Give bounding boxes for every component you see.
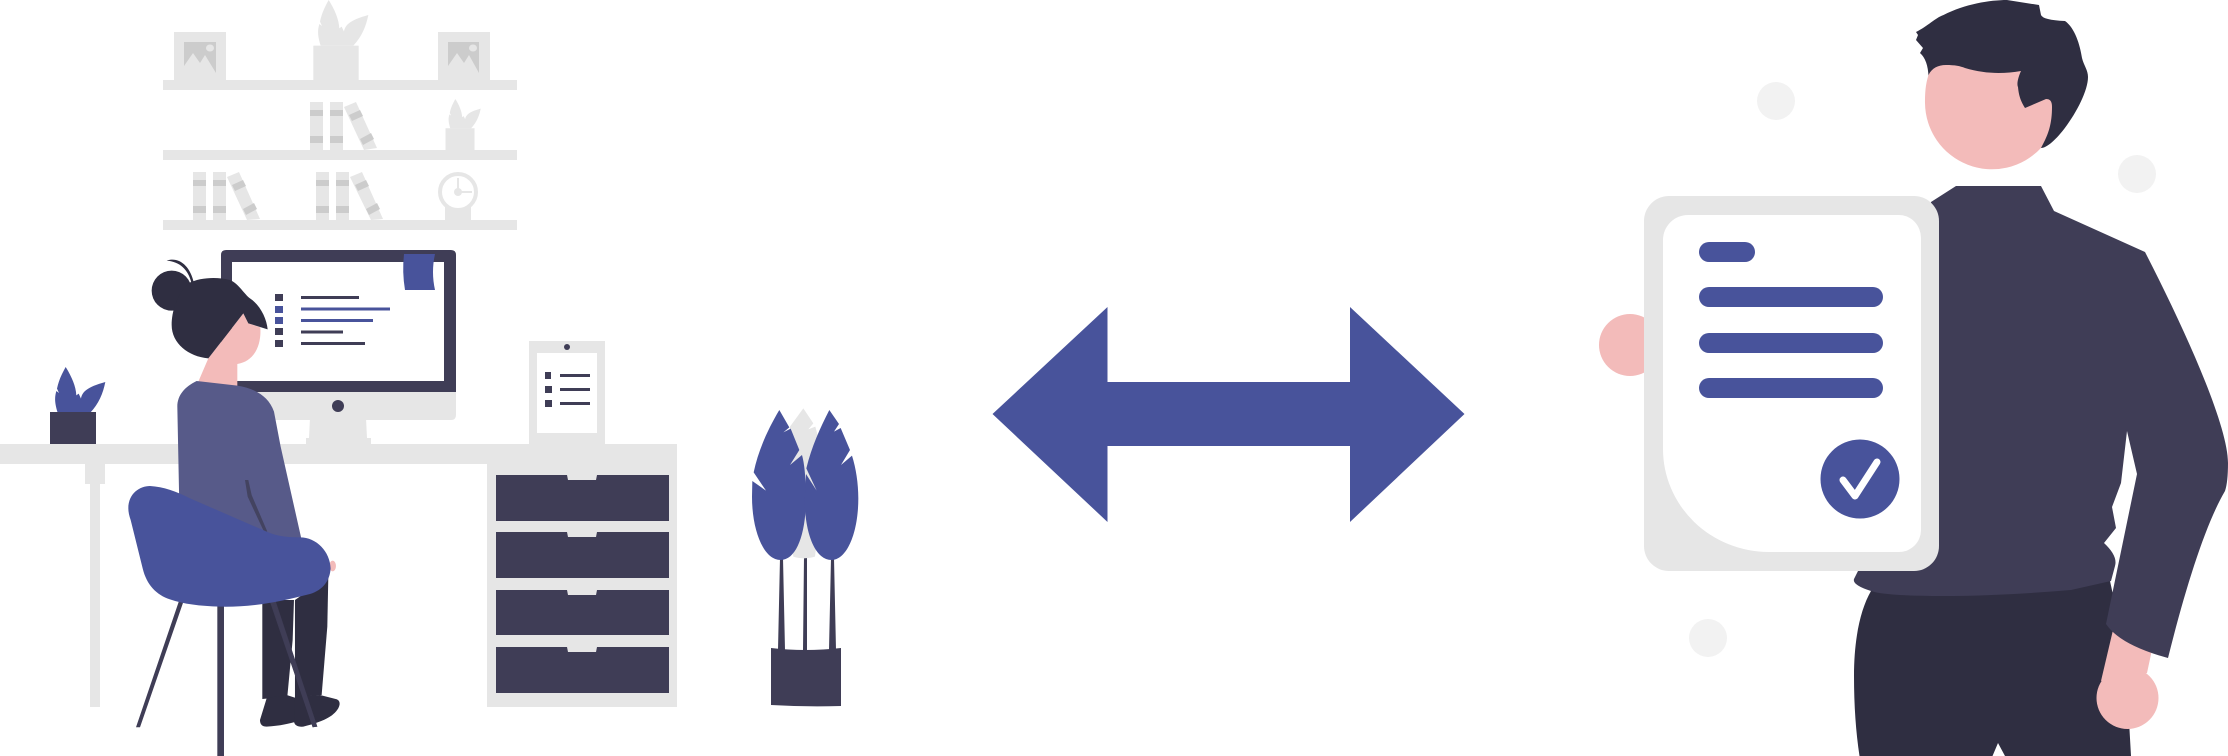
figure: man holding document [1599, 0, 2228, 756]
icon: picture frame right [438, 32, 490, 80]
icon: small plant on shelf 2 [446, 99, 481, 150]
line 1 [1699, 287, 1883, 307]
icon: plant on shelf 1 [313, 0, 368, 80]
icon: potted plant on desk [50, 367, 105, 444]
hair [152, 260, 268, 358]
sweater [177, 381, 302, 540]
left trouser leg [262, 600, 294, 699]
decorative circle top [1757, 82, 1795, 120]
shelf 2 [163, 150, 517, 160]
icon: check badge [1820, 440, 1900, 518]
panel: bookshelves [163, 0, 517, 230]
desk top [0, 444, 677, 464]
icon: picture frame left [174, 32, 226, 80]
line short [1699, 242, 1755, 262]
leaf grey [785, 408, 822, 558]
left hand [1599, 314, 1661, 376]
screen list [275, 294, 390, 347]
leaves [752, 408, 858, 560]
chair legs [136, 600, 317, 756]
decorative circle right [2118, 155, 2156, 193]
right shoe [294, 695, 340, 727]
cabinet [487, 464, 677, 707]
sticky note [403, 254, 435, 290]
icon: books on shelf 3 right [316, 172, 383, 220]
line 3 [1699, 378, 1883, 398]
stems [778, 556, 836, 650]
figure: woman at desk [128, 260, 340, 756]
icon: tall potted plant [752, 408, 858, 706]
tablet on stand [529, 341, 605, 444]
icon: books on shelf 3 left [193, 172, 260, 220]
left shoe [260, 695, 297, 727]
decorative circle bottom [1689, 619, 1727, 657]
pot [771, 648, 841, 706]
right trouser leg [295, 577, 328, 697]
chair seat [128, 486, 331, 607]
document sheet [1663, 215, 1921, 552]
document board [1644, 196, 1939, 571]
monitor [221, 250, 456, 444]
sweater fold [245, 480, 267, 532]
document [1644, 196, 1939, 571]
chair leg front [272, 604, 317, 727]
shelf 3 [163, 220, 517, 230]
desk leg [85, 464, 105, 707]
hair [1916, 0, 2088, 148]
shelf 1 [163, 80, 517, 90]
neck and face [198, 313, 260, 387]
icon: books on shelf 2 [310, 102, 377, 150]
line 2 [1699, 333, 1883, 353]
panel: desk [0, 250, 677, 707]
sweater [1854, 186, 2228, 658]
face [1925, 65, 2052, 169]
icon: clock [440, 174, 476, 220]
hand [329, 561, 336, 571]
leaf left [752, 410, 806, 560]
leaf right [805, 410, 858, 560]
lower body and chair [128, 480, 340, 756]
right arm and hand [2096, 630, 2158, 729]
arrow: double-headed [992, 307, 1464, 522]
pants [1854, 581, 2131, 756]
